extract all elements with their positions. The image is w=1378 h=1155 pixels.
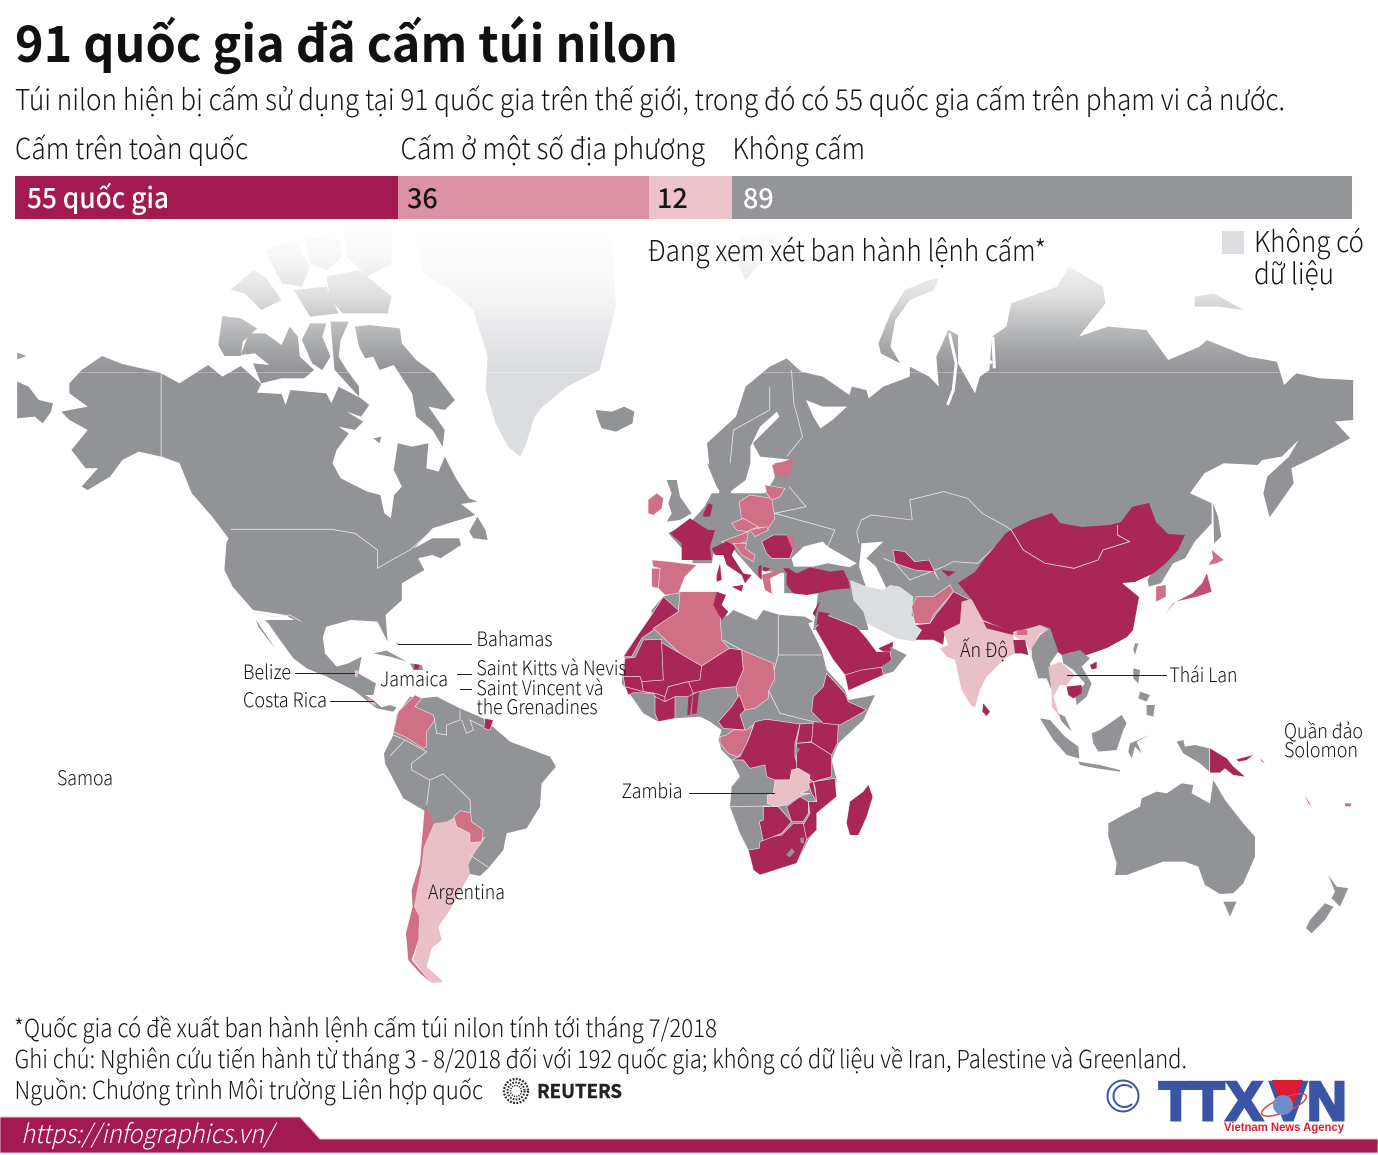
Slovakia (750, 527, 768, 537)
world map (0, 224, 1378, 983)
South Korea (1156, 585, 1166, 602)
Ireland (648, 493, 663, 515)
Sardinia and Corsica (717, 563, 722, 582)
Thailand (1048, 662, 1075, 717)
copyright symbol (1108, 1080, 1138, 1112)
map labels and leader lines: Jamaica (380, 663, 448, 692)
Saudi Arabia (815, 615, 892, 675)
Tunisia (713, 592, 728, 620)
legend labels: Cấm ở một số địa phương (400, 126, 705, 168)
Zimbabwe (787, 797, 808, 822)
TTXVN logo: N (1307, 1070, 1347, 1132)
TTXVN logo: T (1159, 1070, 1193, 1132)
Paraguay (454, 811, 483, 843)
New Britain (1237, 755, 1253, 762)
map labels and leader lines: Bahamas (476, 623, 552, 652)
land: Korea and Japan (1156, 550, 1224, 613)
Pakistan (915, 592, 970, 645)
title: 91 quốc gia đã cấm túi nilon (15, 5, 678, 77)
UAE (878, 642, 893, 652)
Argentina (413, 817, 486, 983)
stacked bar: 12 (657, 177, 688, 216)
Botswana (759, 807, 792, 842)
Czech Republic (732, 518, 758, 532)
Spain (652, 560, 697, 595)
Uganda (797, 723, 813, 743)
French Guiana (484, 718, 493, 730)
Chad (736, 650, 775, 710)
map labels and leader lines: Thái Lan (1170, 659, 1238, 688)
map labels and leader lines (57, 623, 1363, 905)
Italy (712, 542, 752, 583)
Kenya (812, 722, 838, 755)
land: Africa (622, 592, 875, 875)
Cambodia (1067, 685, 1082, 698)
White Sea (806, 400, 847, 428)
footer band with URL tab: https://infographics.vn/ (21, 1114, 278, 1151)
map labels and leader lines: Costa Rica (243, 684, 327, 713)
land: Eurasia (668, 233, 1353, 630)
Algeria (653, 592, 729, 666)
Moldova (787, 535, 795, 548)
footnotes (14, 1009, 1187, 1107)
map labels and leader lines: Argentina (428, 876, 505, 905)
map labels and leader lines: Saint Kitts và Nevis (476, 652, 626, 681)
land: North America (17, 230, 488, 642)
Senegal and Gambia (623, 677, 643, 692)
Bhutan (1017, 630, 1027, 635)
Zambia (767, 768, 810, 807)
legend labels: Không cấm (732, 126, 865, 168)
land: Greenland (no data) (416, 237, 616, 457)
Yemen (845, 667, 883, 691)
land: Iceland (596, 407, 634, 432)
Chile (406, 805, 434, 982)
Benin (692, 692, 699, 714)
Ethiopia and Eritrea (812, 673, 867, 725)
Guinea-Bissau and Guinea (625, 687, 665, 702)
DR Congo (732, 719, 800, 780)
Papua New Guinea (1210, 748, 1245, 777)
Ob and Yenisei gulfs (947, 333, 994, 405)
map labels and leader lines: Saint Vincent và (476, 672, 604, 701)
land: Mexico and Central America (256, 620, 423, 712)
map labels and leader lines: Solomon (1284, 734, 1358, 763)
land: China and Mongolia (958, 503, 1185, 655)
Niger (688, 648, 743, 693)
Poland (739, 495, 775, 528)
Caspian Sea (859, 542, 888, 592)
Croatia (733, 543, 755, 562)
Cote d'Ivoire (655, 697, 675, 722)
stacked bar: 36 (407, 177, 438, 216)
TTXVN logo: T (1191, 1070, 1225, 1132)
Black Sea (791, 542, 857, 567)
Morocco (623, 597, 680, 657)
label: under consideration: Đang xem xét ban hành lệnh cấm* (648, 228, 1046, 270)
North America borders (161, 373, 432, 638)
Netherlands (703, 503, 713, 517)
map labels and leader lines: Belize (243, 656, 291, 685)
Cameroon (718, 695, 745, 730)
TTXVN logo: V (1270, 1070, 1307, 1132)
Turkey (783, 567, 850, 595)
legend labels (15, 126, 865, 168)
Colombia (393, 695, 435, 748)
stacked bar: 55 quốc gia (27, 177, 169, 217)
Greece (762, 570, 787, 597)
TTXVN logo (1159, 1070, 1347, 1134)
legend labels: Cấm trên toàn quốc (15, 126, 248, 168)
Albania and North Macedonia (758, 565, 770, 580)
Iran (850, 580, 922, 642)
South Africa (748, 823, 807, 875)
Togo (687, 695, 693, 715)
land: South America (384, 695, 556, 983)
faint parallel line (0, 372, 1378, 373)
Afghanistan (912, 585, 953, 623)
Mauritania (623, 639, 663, 682)
map labels and leader lines: Samoa (57, 762, 113, 791)
map labels and leader lines: the Grenadines (476, 691, 598, 720)
Nepal (983, 622, 1013, 635)
land: South-East Asia and Oceania (983, 622, 1352, 933)
legend: no data: Không có (1254, 219, 1364, 261)
Hainan (1090, 662, 1097, 669)
Tanzania (797, 742, 832, 782)
Madagascar (847, 785, 873, 835)
footnotes: *Quốc gia có đề xuất ban hành lệnh cấm túi nilon tính tới tháng 7/2018 (14, 1009, 717, 1045)
legend: no data: dữ liệu (1254, 251, 1334, 293)
Malawi (808, 782, 817, 802)
Oman (880, 647, 907, 675)
TTXVN logo: Vietnam News Agency (1224, 1122, 1345, 1134)
Austria (722, 532, 748, 545)
Honshu, Shikoku, Kyushu (1166, 573, 1212, 613)
Mali (642, 643, 702, 697)
footer band with URL tab (0, 1114, 1378, 1153)
top fade of the map (0, 224, 1378, 372)
footnotes: Nguồn: Chương trình Môi trường Liên hợp quốc (14, 1071, 483, 1107)
Gabon and Congo (720, 725, 753, 757)
land: Middle East and South Asia (815, 580, 1015, 716)
India (940, 598, 1015, 707)
Israel and Jordan (813, 602, 830, 625)
Estonia (772, 458, 794, 477)
France (670, 518, 715, 560)
Hokkaido (1208, 550, 1224, 565)
map labels and leader lines: Quần đảo (1284, 715, 1363, 744)
Bangladesh (1013, 640, 1028, 655)
map labels and leader lines: Ấn Độ (960, 634, 1008, 663)
stacked bar: 89 (743, 177, 774, 216)
Lesotho and Eswatini (786, 748, 804, 857)
Burkina Faso (665, 682, 693, 702)
Reuters logo: REUTERS (537, 1077, 622, 1104)
small Caribbean ban markers (355, 642, 419, 706)
stacked bar (15, 176, 1352, 219)
Lithuania (765, 485, 785, 500)
land: Europe (648, 480, 850, 625)
Portugal (652, 568, 660, 588)
Sri Lanka (982, 703, 990, 716)
TTXVN logo: X (1226, 1070, 1263, 1132)
Romania (762, 535, 793, 558)
Kyrgyzstan (941, 570, 956, 577)
legend: no data (1222, 219, 1364, 293)
Mozambique (803, 778, 837, 840)
Fiji and Pacific islands (1260, 758, 1352, 807)
Sicily (732, 585, 743, 592)
footnotes: Ghi chú: Nghiên cứu tiến hành từ tháng 3 - 8/2018 đối với 192 quốc gia; không có dữ liệu về Iran, Palestine và Greenland. (14, 1040, 1187, 1076)
Uzbekistan (893, 550, 939, 580)
map labels and leader lines: Zambia (622, 775, 682, 804)
